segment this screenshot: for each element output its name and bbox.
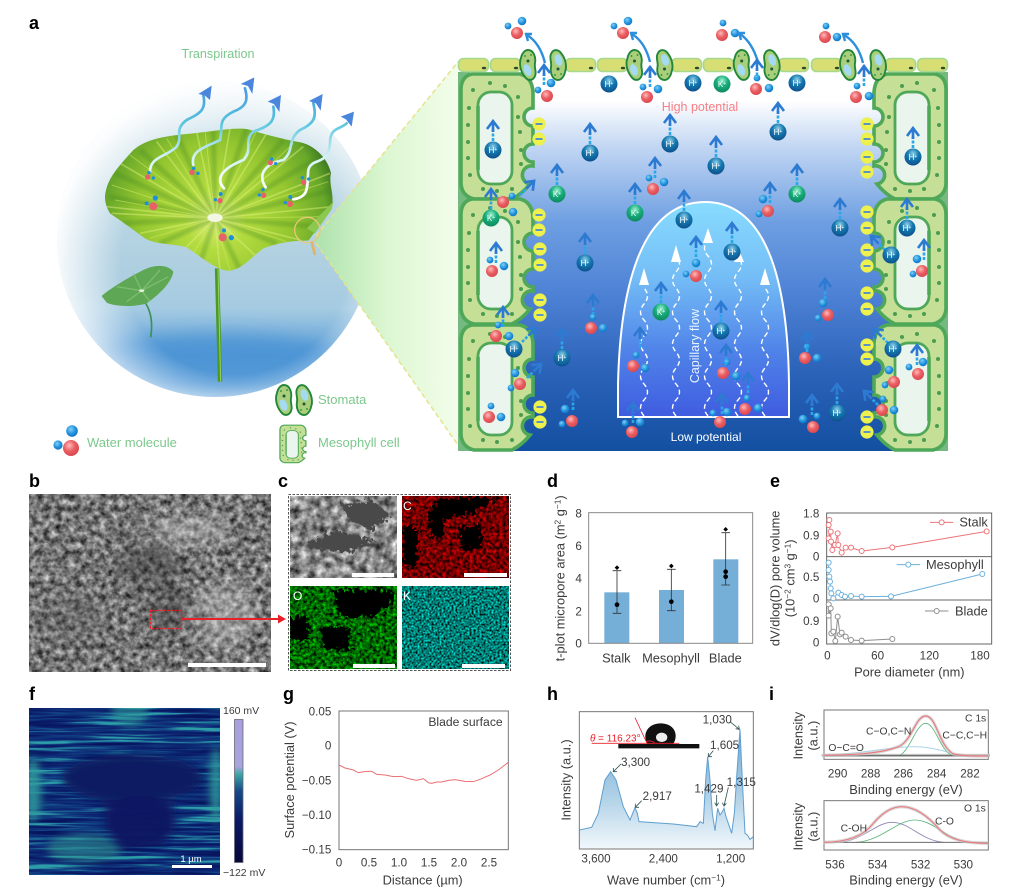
C 1s x title: Binding energy (eV): [849, 782, 963, 797]
y tick labels: 0.5: [803, 571, 819, 584]
side tissue bands: [458, 72, 948, 451]
y axis title: Intensity (a.u.): [559, 739, 574, 821]
O 1s components: [824, 820, 988, 842]
y tick labels: 0.05: [309, 705, 331, 718]
capillary wavy flow lines: [640, 240, 768, 416]
epidermis cells: [458, 58, 948, 72]
O 1s x ticks: 536: [825, 858, 845, 871]
C 1s baseline: [822, 751, 990, 760]
x tick labels: 0: [824, 650, 831, 663]
panel label: d: d: [547, 471, 558, 491]
map: O: O: [293, 589, 302, 603]
legend: water molecule: Water molecule: [87, 435, 177, 450]
spectrum fill: [579, 729, 753, 849]
x tick labels: 2,400: [649, 853, 678, 866]
scale bar: [188, 663, 266, 667]
capillary dome: [618, 202, 789, 417]
arrowheads: [198, 77, 354, 127]
potassium ions: K: [718, 80, 723, 89]
bars: [604, 559, 738, 643]
x tick labels: 1.0: [391, 856, 408, 869]
y axis title: g: [553, 509, 568, 520]
O 1s fit: [823, 807, 988, 843]
hydrogen ions: H: [717, 327, 722, 336]
hydrogen ions: +: [563, 355, 566, 361]
inset label: Blade surface: [428, 715, 503, 729]
peak labels: [621, 713, 756, 803]
contact angle droplet: [592, 718, 699, 748]
panel label: i: i: [769, 684, 774, 704]
dashed frame: [288, 494, 510, 670]
hydrogen ions: H: [489, 146, 494, 155]
hydrogen ions: +: [685, 217, 688, 223]
spectrum line: [579, 729, 753, 839]
panel label: g: g: [283, 684, 294, 704]
x axis title: ): [721, 873, 725, 888]
potassium ions: K: [657, 308, 662, 317]
chart frame: [827, 513, 992, 644]
leaf water molecules: [145, 157, 310, 241]
O 1s x ticks: 530: [954, 858, 974, 871]
hydrogen ions: H: [728, 248, 733, 257]
hydrogen ions: H: [887, 251, 892, 260]
O 1s labels: [841, 803, 986, 834]
potassium ions: K: [553, 190, 558, 199]
legend: mesophyll: Mesophyll: [926, 557, 984, 572]
C 1s x ticks: 286: [894, 767, 913, 780]
curved arrows out of stomata: [526, 33, 863, 63]
hydrogen ions: +: [838, 410, 841, 416]
hydrogen ions: +: [908, 225, 911, 231]
potassium ions: K: [487, 214, 492, 223]
y tick labels: 0.9: [803, 615, 819, 628]
capillary white arrowheads: [639, 228, 770, 285]
C 1s labels: C−O,C−N: [866, 726, 911, 737]
mesophyll series: [826, 560, 985, 601]
C 1s x ticks: 284: [927, 767, 947, 780]
panel label: f: f: [29, 684, 36, 704]
hydrogen ions: +: [671, 141, 674, 147]
magnifier: [295, 202, 333, 255]
y axis title: dV/dlog(D) pore volume: [767, 511, 782, 646]
hydrogen ions: H: [889, 345, 894, 354]
legend: stomata: [276, 385, 367, 415]
hydrogen ions: +: [892, 252, 895, 258]
heading: Transpiration: Transpiration: [181, 47, 255, 61]
hydrogen ions: H: [793, 79, 798, 88]
peak arrows: [613, 722, 739, 807]
label: high potential: High potential: [662, 100, 738, 114]
y axis units: cm: [783, 569, 798, 589]
peak labels: 3,300: [621, 756, 651, 769]
y tick labels: 1.8: [803, 507, 819, 520]
C 1s labels: C−C,C−H: [942, 731, 987, 742]
hydrogen ions: +: [779, 129, 782, 135]
y tick labels: 0: [813, 637, 820, 650]
hydrogen ions: H: [833, 409, 838, 418]
SEM detail: [290, 496, 397, 578]
hydrogen ions: H: [581, 259, 586, 268]
O 1s labels: C-OH: [841, 823, 867, 834]
x tick labels: 0.5: [361, 856, 377, 869]
x axis title: Pore diameter (nm): [854, 664, 965, 679]
scale bar: 1 µm: [180, 854, 202, 865]
panel label: e: e: [770, 471, 780, 491]
hydrogen ions: +: [694, 80, 697, 86]
y tick labels: 0: [325, 740, 332, 753]
axes frame: [579, 712, 753, 849]
x tick labels: [824, 650, 990, 663]
y axis title: −1: [553, 499, 563, 509]
y axis title: t-plot micropore area (m: [553, 524, 568, 661]
panel e: pore volume line charts: [767, 507, 992, 679]
panel g: surface potential line chart: [282, 705, 508, 888]
O 1s x ticks: 532: [911, 858, 930, 871]
peak labels: 2,917: [643, 790, 672, 803]
cone dashed edges: [316, 62, 458, 445]
x tick labels: [581, 853, 746, 866]
panel label: b: b: [29, 471, 40, 491]
panel a: transpiration leaf sphere: [55, 62, 458, 445]
legend: blade: Blade: [955, 603, 988, 618]
leaf illustration: [100, 77, 354, 382]
C 1s frame: [824, 710, 988, 759]
leaf centre: [207, 213, 223, 222]
O 1s frame: [824, 801, 988, 850]
legend: stalk: [930, 515, 988, 530]
main leaf: [105, 128, 333, 271]
x tick labels: 180: [970, 650, 990, 663]
small leaf: [102, 266, 173, 337]
y tick labels: 6: [575, 540, 582, 553]
x tick labels: 2.5: [481, 856, 497, 869]
peak labels: 1,429: [694, 783, 724, 796]
O 1s y unit: (a.u.): [805, 812, 820, 842]
map: K: K: [403, 589, 411, 603]
x tick labels: 2.0: [451, 856, 468, 869]
O 1s chart: [790, 801, 988, 888]
y tick labels: −0.15: [302, 844, 331, 857]
panel label: a: a: [29, 13, 40, 33]
y tick labels: 2: [575, 605, 582, 618]
O 1s x ticks: [825, 858, 974, 871]
x axis title: Distance (µm): [383, 873, 463, 888]
x tick labels: 3,600: [581, 853, 611, 866]
legend: mesophyll cell: Mesophyll cell: [318, 435, 400, 450]
potassium ions: K: [793, 190, 798, 199]
data points: [615, 527, 728, 607]
x axis title: Wave number (cm: [607, 873, 711, 888]
panel f: surface potential map: [25, 694, 265, 879]
hydrogen ions: +: [717, 163, 720, 169]
potassium ions: +: [558, 191, 561, 197]
scale bar: [172, 854, 212, 868]
x tick labels: 1.5: [421, 856, 437, 869]
legend: mesophyll cell: [280, 425, 400, 463]
potassium ions: +: [723, 81, 726, 87]
stalk series: [826, 517, 989, 555]
y tick labels: 0.9: [803, 529, 819, 542]
y axis units: g: [783, 553, 798, 564]
peak labels: 1,030: [703, 713, 732, 726]
hydrogen ions: H: [666, 140, 671, 149]
C 1s chart: [790, 710, 990, 797]
panel d: micropore area bar chart: [553, 495, 753, 665]
hydrogen ions: H: [903, 224, 908, 233]
panel label: h: h: [547, 684, 558, 704]
x tick labels: 60: [871, 650, 885, 663]
C 1s x ticks: 288: [861, 767, 880, 780]
hydrogen ions: H: [558, 354, 563, 363]
hydrogen ions: H: [680, 216, 685, 225]
colour bar: 160 mV: [223, 705, 259, 717]
panel h: FTIR spectrum: [559, 712, 756, 888]
y tick labels: −0.10: [302, 809, 332, 822]
y tick labels: 0: [575, 638, 582, 651]
label: capillary flow: Capillary flow: [688, 308, 702, 383]
O 1s envelope: [823, 807, 988, 843]
hydrogen ions: +: [841, 225, 844, 231]
hydrogen ions: H: [605, 80, 610, 89]
stomata: [520, 50, 886, 80]
negative charges: [532, 117, 874, 439]
y tick labels: 0: [813, 593, 820, 606]
peak labels: 1,315: [727, 776, 756, 789]
main stem: [217, 268, 220, 382]
potential map clip group: [29, 708, 220, 875]
y tick labels: 4: [575, 573, 582, 586]
hydrogen ions: +: [515, 346, 518, 352]
legend: mesophyll: [897, 557, 984, 572]
C 1s labels: C 1s: [965, 713, 986, 724]
colour bar: −122 mV: [223, 867, 265, 879]
O 1s labels: O 1s: [964, 803, 986, 814]
magnified cone: [316, 62, 458, 445]
red arrow to panel c: [181, 614, 286, 624]
selection box: [150, 610, 182, 628]
blade series: [826, 602, 895, 643]
y tick labels: [575, 507, 582, 651]
C 1s labels: [828, 713, 987, 754]
potassium ions: +: [662, 309, 665, 315]
hydrogen ions: +: [914, 154, 917, 160]
potassium ions: [482, 76, 806, 320]
y tick labels: −0.05: [302, 774, 331, 787]
label: low potential: Low potential: [671, 430, 741, 444]
y axis units: (10: [783, 599, 798, 617]
panel i: XPS spectra: [790, 710, 990, 888]
potassium ions: +: [492, 215, 495, 221]
hydrogen ions: +: [733, 249, 736, 255]
hydrogen ions: +: [494, 147, 497, 153]
potassium ions: K: [631, 209, 636, 218]
hydrogen ions: +: [894, 346, 897, 352]
SEM tone variation: [30, 510, 262, 657]
colour bar: [223, 705, 265, 879]
error bars: [613, 533, 730, 613]
water molecules: [483, 17, 928, 438]
y axis title: ): [553, 495, 568, 500]
O 1s x title: Binding energy (eV): [849, 873, 963, 888]
x tick labels: 1,200: [716, 853, 746, 866]
left mesophyll cells: [461, 74, 533, 450]
C 1s components: [823, 723, 988, 756]
C 1s labels: O−C=O: [828, 743, 864, 754]
O 1s x ticks: 534: [868, 858, 888, 871]
hydrogen ions: [484, 74, 922, 422]
y axis units: 3: [783, 564, 793, 569]
hydrogen ions: H: [836, 224, 841, 233]
y axis title: 2: [553, 519, 563, 524]
panel b: SEM image: [29, 494, 286, 672]
hydrogen ions: +: [722, 328, 725, 334]
C 1s y title: Intensity: [790, 711, 805, 760]
gradient chamber: [458, 70, 948, 451]
panel label: c: c: [278, 471, 288, 491]
potassium ions: +: [798, 191, 801, 197]
y tick labels: [803, 507, 820, 650]
x tick labels: 0: [336, 856, 343, 869]
category labels: Stalk: [602, 650, 631, 665]
map: C: C: [403, 499, 412, 513]
y axis units: −2: [783, 589, 793, 599]
contact angle value: θ = 116.23°: [590, 733, 641, 744]
hydrogen ions: H: [909, 153, 914, 162]
sphere background: [55, 79, 375, 399]
category labels: [602, 650, 742, 665]
C 1s fit: [823, 716, 988, 756]
O 1s y title: Intensity: [790, 802, 805, 851]
category labels: Mesophyll: [642, 650, 700, 665]
transpiration wavy arrows: [150, 88, 347, 199]
peak labels: 1,605: [710, 739, 739, 752]
map: C: [402, 496, 509, 578]
potential curve: [339, 762, 508, 783]
right mesophyll cells: [874, 74, 946, 450]
panel a: leaf cross-section: [458, 17, 948, 451]
axes frame: [589, 513, 753, 643]
C 1s y unit: (a.u.): [805, 721, 820, 751]
potassium ions: +: [636, 210, 639, 216]
hydrogen ions: H: [774, 128, 779, 137]
map: K: [402, 586, 509, 669]
y tick labels: 8: [575, 507, 582, 520]
legend: stomata: Stomata: [318, 392, 367, 407]
legend: stalk: Stalk: [959, 515, 988, 530]
x axis title: −1: [711, 873, 721, 883]
hydrogen ions: +: [610, 81, 613, 87]
C 1s x ticks: [828, 767, 980, 780]
legend: water molecule: [53, 425, 177, 456]
hydrogen ions: H: [712, 162, 717, 171]
C 1s x ticks: 290: [828, 767, 848, 780]
y axis title: Surface potential (V): [282, 722, 297, 838]
upward arrows: [485, 60, 930, 423]
C 1s envelope: [823, 716, 988, 756]
axes frame: [339, 711, 508, 850]
map: O: [290, 586, 397, 669]
panel c: element maps: [288, 494, 510, 670]
O 1s labels: C-O: [935, 817, 954, 828]
y tick labels: [302, 705, 332, 857]
SEM texture: [29, 494, 271, 672]
y tick labels: 0: [813, 551, 820, 564]
hydrogen ions: +: [798, 80, 801, 86]
y axis units: ): [783, 539, 798, 544]
x tick labels: 120: [920, 650, 940, 663]
y axis units: −1: [783, 543, 793, 553]
C 1s x ticks: 282: [960, 767, 980, 780]
x tick labels: [336, 856, 497, 869]
hydrogen ions: H: [510, 345, 515, 354]
hydrogen ions: H: [586, 149, 591, 158]
legend: blade: [925, 603, 988, 618]
hydrogen ions: H: [689, 79, 694, 88]
hydrogen ions: +: [591, 150, 594, 156]
category labels: Blade: [709, 650, 742, 665]
hydrogen ions: +: [586, 260, 589, 266]
